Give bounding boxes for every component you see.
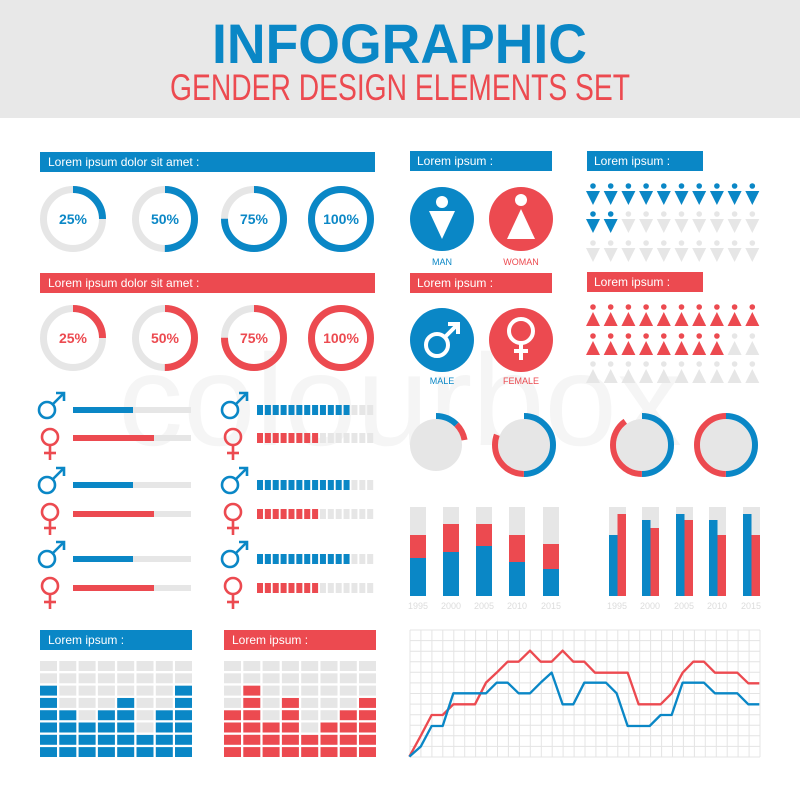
- panel: female pictogram grid: Lorem ipsum :: [594, 275, 670, 289]
- header band: [0, 0, 800, 118]
- watermark: colourbox: [118, 327, 682, 473]
- panel: solid progress bars: [39, 393, 191, 609]
- subtitle: GENDER DESIGN ELEMENTS SET: [170, 67, 630, 108]
- chart: grouped bars: 2010: [707, 601, 727, 611]
- heading bar red: Lorem ipsum dolor sit amet :: [48, 276, 199, 290]
- panel: blue percentage donuts: 25%: [59, 211, 88, 227]
- panel: blue percentage donuts: 50%: [151, 211, 180, 227]
- heading bar blue: [40, 152, 375, 172]
- panel: red percentage donuts: 100%: [323, 330, 359, 346]
- heading bar red: [40, 273, 375, 293]
- chart: grouped bars: 2015: [741, 601, 761, 611]
- icon: male: [410, 308, 474, 372]
- panel: male pictogram grid: [586, 151, 759, 262]
- panel: man woman icons: Lorem ipsum :: [417, 154, 493, 168]
- icon: woman: [489, 187, 553, 251]
- panel: man woman icons: [410, 151, 553, 267]
- panel: blue percentage donuts: 75%: [240, 211, 269, 227]
- panel: man woman icons: WOMAN: [503, 257, 539, 267]
- chart: grouped bars: [607, 507, 761, 611]
- panel: male female icons: MALE: [430, 376, 454, 386]
- panel: blue block chart: Lorem ipsum :: [48, 633, 124, 647]
- panel: red percentage donuts: [40, 273, 375, 368]
- panel: blue percentage donuts: [40, 152, 375, 248]
- chart: stacked bars: 1995: [408, 601, 428, 611]
- panel: male female icons: [410, 273, 553, 386]
- chart: grouped bars: 2005: [674, 601, 694, 611]
- panel: male female icons: Lorem ipsum :: [417, 276, 493, 290]
- chart: stacked bars: 2010: [507, 601, 527, 611]
- chart: grouped bars: 2000: [640, 601, 660, 611]
- chart: stacked bars: 2000: [441, 601, 461, 611]
- heading bar blue: Lorem ipsum dolor sit amet :: [48, 155, 199, 169]
- panel: man woman icons: MAN: [432, 257, 452, 267]
- icon: man: [410, 187, 474, 251]
- panel: red percentage donuts: 25%: [59, 330, 88, 346]
- chart: line chart: [409, 630, 760, 757]
- panel: female pictogram grid: [586, 272, 759, 383]
- chart: stacked bars: [408, 507, 561, 611]
- panel: red percentage donuts: 75%: [240, 330, 269, 346]
- panel: red percentage donuts: 50%: [151, 330, 180, 346]
- panel: red block chart: [222, 630, 378, 757]
- icon: female: [489, 308, 553, 372]
- panel: ratio donuts: [407, 416, 755, 474]
- chart: stacked bars: 2015: [541, 601, 561, 611]
- panel: blue block chart: [38, 630, 194, 757]
- panel: male female icons: FEMALE: [503, 376, 539, 386]
- line: blue series: [409, 673, 759, 757]
- line: red series: [409, 651, 759, 757]
- title: INFOGRAPHIC: [212, 12, 587, 75]
- panel: red block chart: Lorem ipsum :: [232, 633, 308, 647]
- chart: grouped bars: 1995: [607, 601, 627, 611]
- panel: segmented progress bars: [222, 393, 375, 609]
- panel: blue percentage donuts: 100%: [323, 211, 359, 227]
- chart: stacked bars: 2005: [474, 601, 494, 611]
- panel: male pictogram grid: Lorem ipsum :: [594, 154, 670, 168]
